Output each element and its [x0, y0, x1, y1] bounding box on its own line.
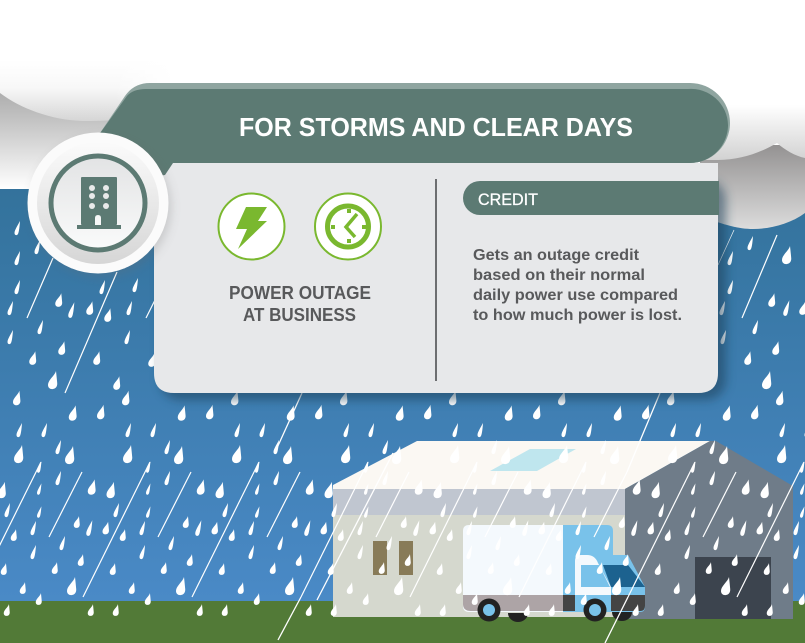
credit description: Gets an outage credit [473, 247, 640, 264]
cloud left [0, 55, 175, 189]
panel shadow [160, 180, 726, 400]
credit description: to how much power is lost. [473, 307, 682, 324]
heading: power outage at business: POWER OUTAGE [229, 283, 371, 303]
credit label [463, 181, 719, 215]
cab body [555, 525, 645, 612]
rain lower [0, 391, 805, 616]
cloud right [700, 105, 805, 229]
header back layer [98, 83, 730, 163]
cargo stripe [463, 595, 563, 611]
long rain streaks [277, 393, 660, 643]
wheels [478, 598, 606, 622]
icon: office building [77, 177, 121, 229]
header banner [98, 89, 728, 180]
info panel [154, 163, 718, 393]
building fascia band [333, 489, 625, 515]
sky [0, 185, 805, 605]
credit label: CREDIT [478, 190, 538, 209]
building front wall [333, 515, 625, 617]
cloud right body [700, 145, 805, 229]
heading: power outage at business: AT BUSINESS [243, 305, 356, 325]
icon: clock [315, 194, 381, 260]
title: FOR STORMS AND CLEAR DAYS [239, 112, 633, 142]
cab door [575, 555, 611, 595]
cargo box [463, 525, 563, 612]
grass [0, 601, 805, 643]
rain upper right [718, 230, 805, 389]
skylight [490, 449, 576, 471]
cloud left body [0, 85, 170, 189]
icon badge: building [28, 132, 171, 277]
bumper [611, 595, 645, 611]
cloud left fade [115, 55, 175, 100]
cloud left upper lobe [0, 60, 170, 121]
far wheels [508, 612, 632, 622]
divider [435, 179, 437, 381]
credit description [473, 247, 682, 324]
rain upper left [8, 221, 155, 393]
building roof [333, 441, 710, 489]
credit description: daily power use compared [473, 287, 678, 304]
building [333, 441, 793, 619]
windshield [603, 565, 645, 587]
credit description: based on their normal [473, 267, 645, 284]
building side gable [625, 441, 793, 619]
door window [581, 565, 610, 587]
heading: power outage at business [229, 283, 371, 325]
icon: lightning bolt [218, 194, 284, 260]
chassis [563, 595, 575, 611]
cloud right upper lobe [700, 105, 805, 160]
garage door [695, 557, 771, 619]
truck [463, 525, 645, 622]
windows [373, 541, 413, 575]
